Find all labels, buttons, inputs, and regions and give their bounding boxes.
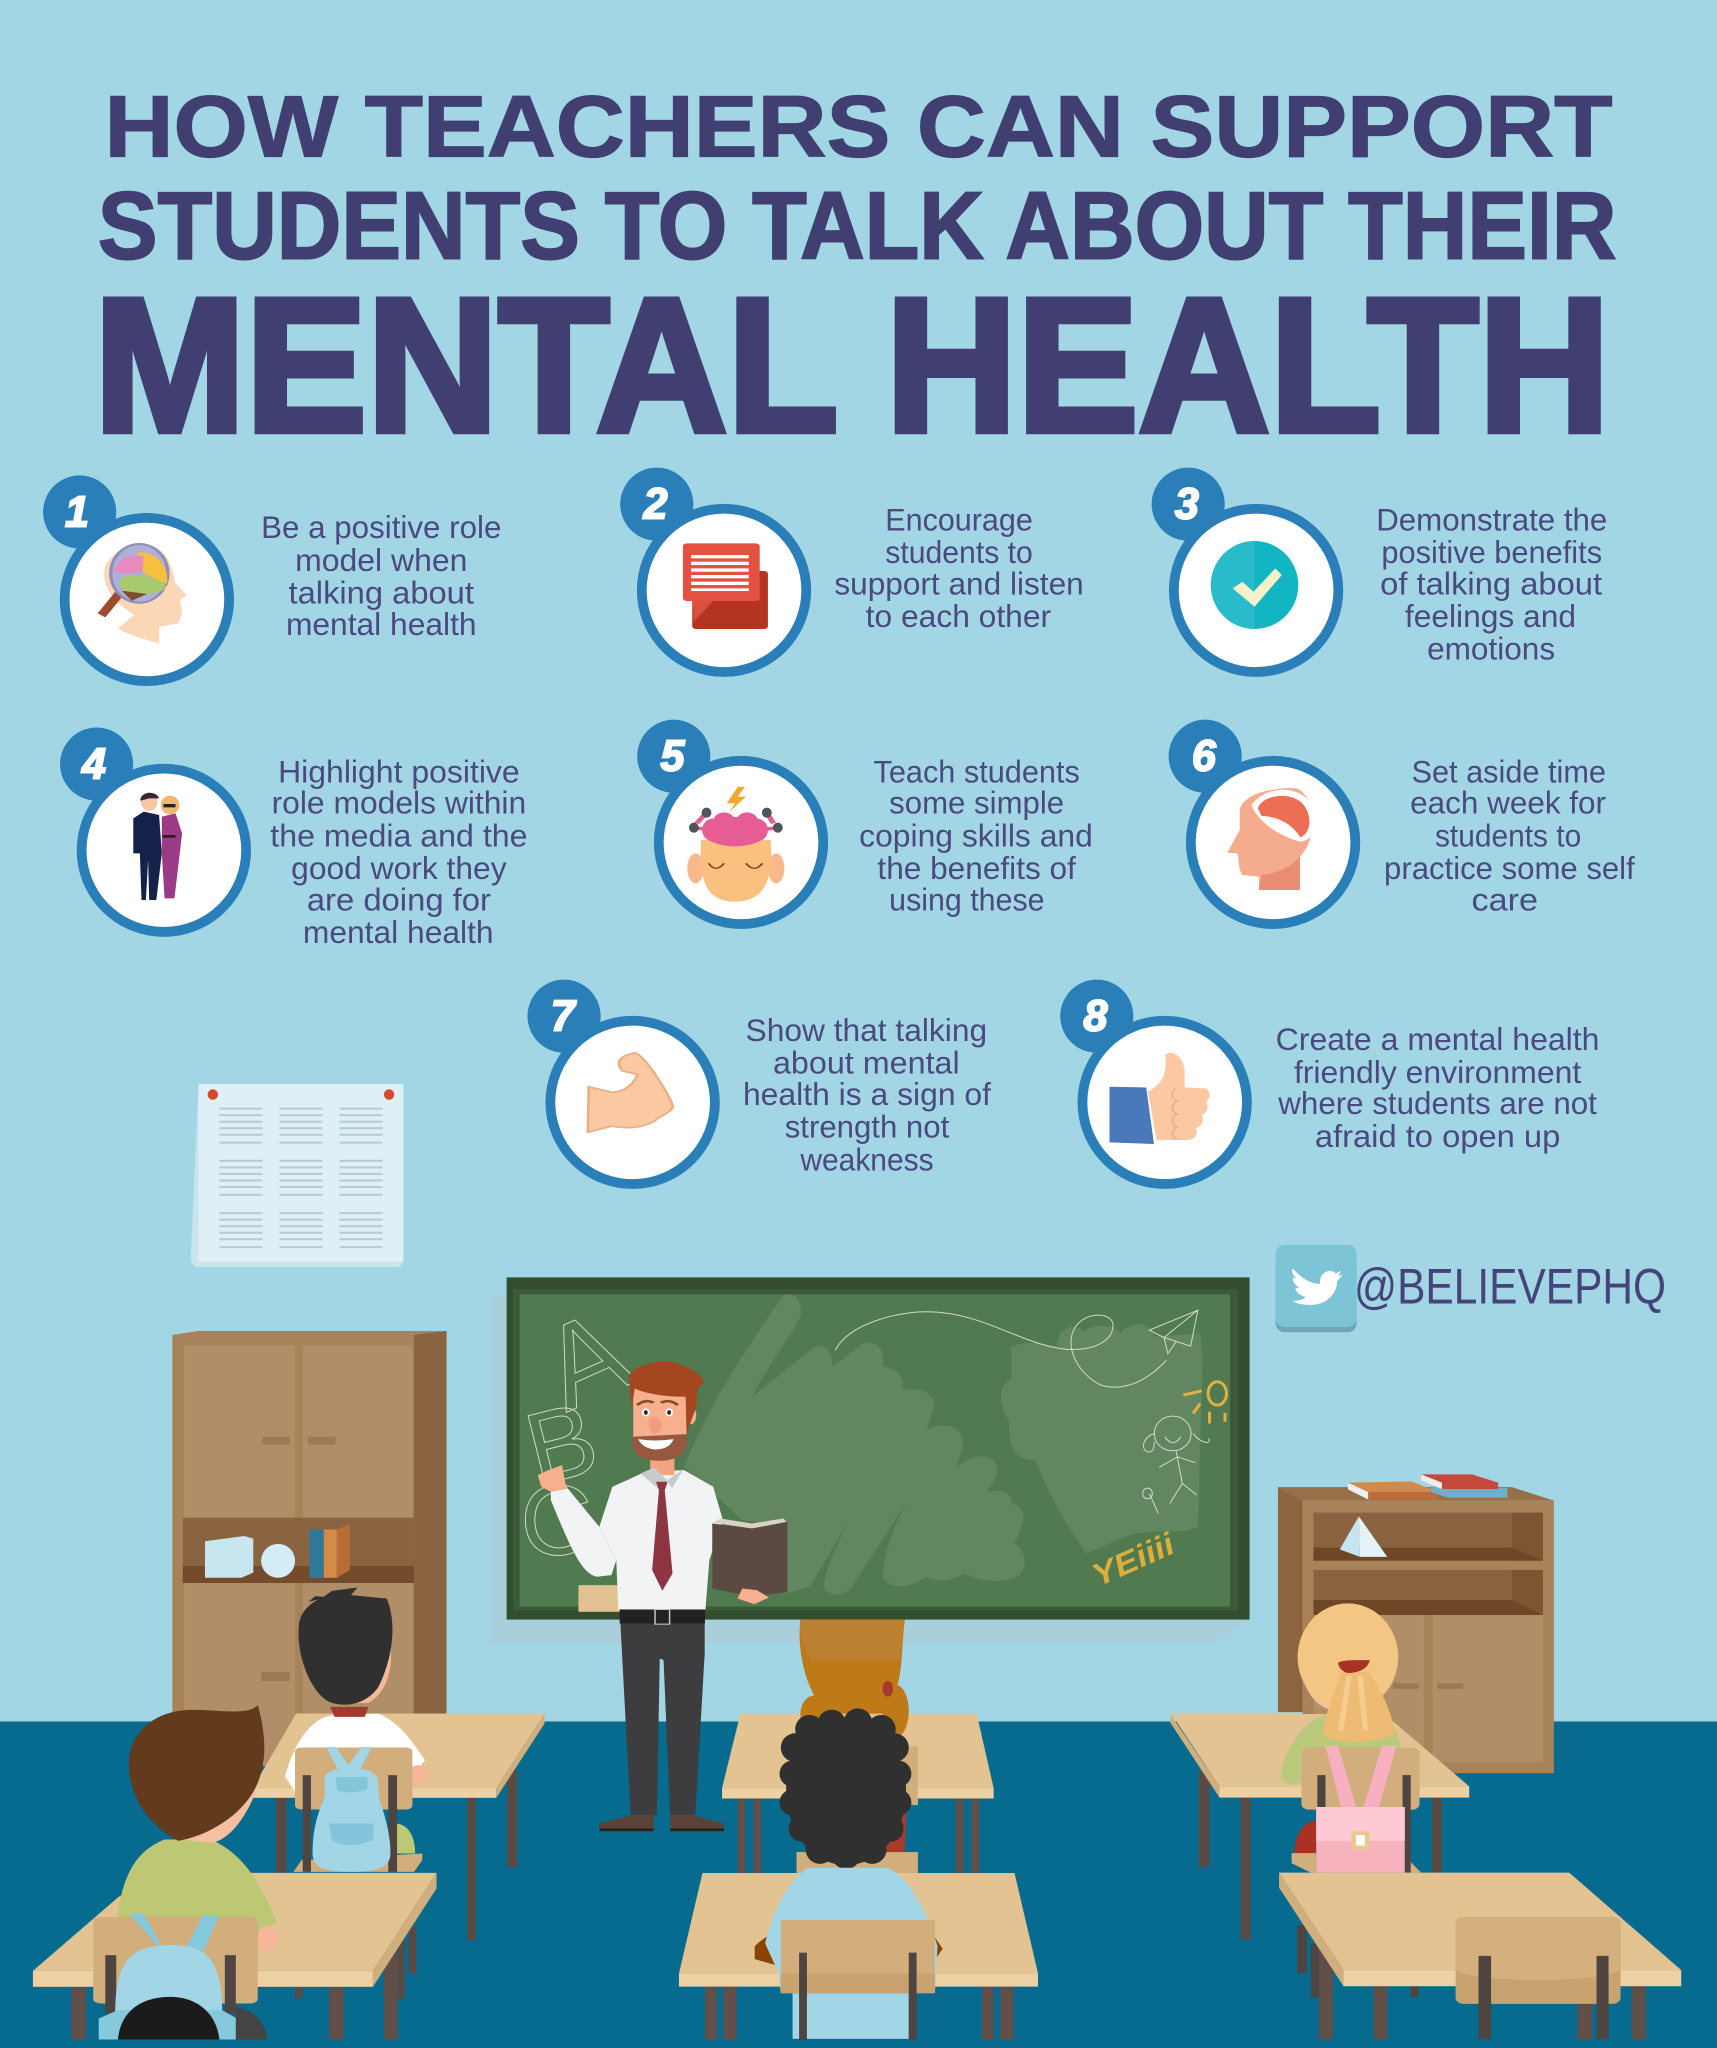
text: step 7: health is a sign of xyxy=(743,1077,991,1112)
panel: step 3 xyxy=(1152,468,1607,672)
text: step 2: support and listen xyxy=(834,566,1084,601)
teacher xyxy=(538,1362,787,1831)
panel: step 6: 6 xyxy=(1192,733,1217,781)
text: step 3 xyxy=(1376,502,1607,667)
panel: step 7: 7 xyxy=(551,993,577,1041)
icon: brain lifting weights xyxy=(687,787,784,902)
text: step 5: using these xyxy=(889,882,1045,917)
chair and backpack xyxy=(93,1913,267,2039)
panel: step 3: 3 xyxy=(1175,481,1199,529)
cabinet: right xyxy=(1278,1474,1554,1773)
text: step 2: Encourage xyxy=(885,502,1033,537)
text: step 3: Demonstrate the xyxy=(1376,502,1607,537)
text: step 3: emotions xyxy=(1427,632,1555,667)
text: step 2 xyxy=(834,502,1084,634)
text: step 1 xyxy=(261,510,501,642)
icon: couple of role models xyxy=(133,792,182,900)
text: step 5: Teach students xyxy=(874,754,1080,789)
student: front middle in blue shirt with chair xyxy=(755,1868,943,2040)
text: step 8: afraid to open up xyxy=(1315,1119,1560,1154)
text: step 8 xyxy=(1276,1022,1599,1154)
icon: calm profile with brain xyxy=(1227,788,1315,890)
text: step 6: students to xyxy=(1435,818,1581,853)
title: STUDENTS TO TALK ABOUT THEIR xyxy=(98,174,1616,280)
chair xyxy=(1456,1917,1621,2039)
neck xyxy=(650,1458,674,1475)
collar xyxy=(641,1467,667,1490)
text: step 5: some simple xyxy=(889,786,1064,821)
title xyxy=(94,78,1616,472)
chalk letters: A xyxy=(523,1284,648,1435)
text: step 4: Highlight positive xyxy=(278,754,520,789)
face xyxy=(686,1407,696,1424)
text: step 7: about mental xyxy=(773,1046,960,1081)
text: step 1: talking about xyxy=(289,575,474,610)
panel: step 8 xyxy=(1060,980,1599,1184)
panel: step 6 xyxy=(1169,720,1635,924)
text: step 6 xyxy=(1384,754,1635,917)
text: step 2: students to xyxy=(885,535,1033,570)
title: MENTAL HEALTH xyxy=(94,259,1610,472)
student: child with curly black hair xyxy=(780,1708,911,1869)
student: girl with orange pigtails, lower xyxy=(796,1681,918,1873)
twitter handle: @BELIEVEPHQ xyxy=(1354,1259,1666,1315)
panel: step 1: 1 xyxy=(65,488,89,536)
pink backpack xyxy=(1316,1746,1405,1873)
text: step 4: mental health xyxy=(303,915,494,950)
cabinet: left xyxy=(172,1331,447,1766)
chalk smudges xyxy=(684,1294,1203,1594)
text: step 6: Set aside time xyxy=(1411,754,1606,789)
chair and backpack xyxy=(293,1747,422,1872)
hand holding book xyxy=(737,1588,769,1604)
icon: twitter bird xyxy=(1276,1245,1357,1332)
panel: step 7 xyxy=(528,980,991,1184)
tie xyxy=(652,1482,672,1591)
text: step 5: coping skills and xyxy=(859,818,1093,853)
panel: step 2 xyxy=(620,468,1084,672)
student: front left with brown hair xyxy=(93,1705,277,2039)
panel: step 1 xyxy=(43,475,501,681)
text: step 6: practice some self xyxy=(1384,851,1635,886)
panel: step 5: 5 xyxy=(660,733,685,781)
poster on wall xyxy=(191,1084,403,1267)
text: step 7: weakness xyxy=(799,1142,934,1177)
icon: thumbs up xyxy=(1110,1053,1210,1144)
belt xyxy=(620,1609,705,1623)
text: step 8: where students are not xyxy=(1277,1086,1597,1121)
text: step 7: Show that talking xyxy=(746,1013,987,1048)
text: step 5: the benefits of xyxy=(877,851,1076,886)
text: step 3: positive benefits xyxy=(1381,535,1602,570)
hair xyxy=(629,1362,704,1433)
shirt xyxy=(599,1470,723,1609)
student: blonde girl with pink backpack xyxy=(1281,1603,1421,1873)
text: step 8: friendly environment xyxy=(1294,1055,1582,1090)
hand with chalk xyxy=(538,1465,568,1492)
text: step 8: Create a mental health xyxy=(1276,1022,1599,1057)
icon: check mark xyxy=(1211,541,1298,629)
eyes xyxy=(642,1408,650,1416)
text: step 4: good work they xyxy=(291,851,507,886)
beige box xyxy=(578,1585,622,1612)
text: step 3: feelings and xyxy=(1405,599,1576,634)
chalk text: YEiiii xyxy=(1087,1526,1181,1593)
pyramid xyxy=(1340,1516,1360,1557)
text: step 2: to each other xyxy=(866,599,1051,634)
panel: step 8: 8 xyxy=(1084,993,1107,1041)
shoes xyxy=(599,1815,654,1828)
chalk letters: B xyxy=(515,1380,608,1507)
student: girl with orange hair, upper xyxy=(800,1620,905,1731)
panel: step 5 xyxy=(637,720,1093,924)
text: step 6: care xyxy=(1472,882,1538,917)
desk: back middle xyxy=(722,1714,994,1874)
blackboard shadow xyxy=(491,1293,1250,1643)
beard xyxy=(632,1434,687,1461)
blackboard xyxy=(507,1277,1250,1620)
text: step 4 xyxy=(270,754,528,950)
text: step 7 xyxy=(743,1013,991,1177)
trousers xyxy=(620,1610,705,1815)
text: step 7: strength not xyxy=(785,1110,950,1145)
panel: step 4: 4 xyxy=(81,740,106,788)
title: HOW TEACHERS CAN SUPPORT xyxy=(104,78,1613,176)
text: step 3: of talking about xyxy=(1380,566,1602,601)
desk: front middle xyxy=(679,1873,1038,2040)
text: step 5 xyxy=(859,754,1093,917)
chalk drawings: plane, loop, stick figure, flower, sun xyxy=(835,1310,1226,1513)
icon: speech bubbles xyxy=(683,543,768,629)
desk: back right xyxy=(1170,1714,1469,1939)
icon: head with magnified brain xyxy=(98,544,186,643)
text: step 1: model when xyxy=(295,543,467,578)
shelf objects xyxy=(205,1524,350,1578)
text: step 1: mental health xyxy=(286,607,477,642)
text: step 4: are doing for xyxy=(307,882,491,917)
desk: back left xyxy=(252,1713,545,1940)
panel: step 4 xyxy=(60,728,528,950)
desk: front left xyxy=(33,1873,437,2039)
books on top xyxy=(1348,1474,1507,1499)
panel: step 2: 2 xyxy=(642,481,667,529)
text: step 4: the media and the xyxy=(270,818,528,853)
chalk letters: C xyxy=(520,1465,592,1576)
open book xyxy=(713,1518,787,1528)
desk: front right with chair xyxy=(1279,1873,1681,2039)
twitter handle xyxy=(1276,1245,1666,1332)
student: back left with white shirt xyxy=(285,1587,427,1872)
chalk letters xyxy=(515,1284,648,1576)
text: step 1: Be a positive role xyxy=(261,510,501,545)
text: step 6: each week for xyxy=(1410,786,1606,821)
text: step 4: role models within xyxy=(272,786,526,821)
icon: flexed arm xyxy=(588,1053,673,1132)
